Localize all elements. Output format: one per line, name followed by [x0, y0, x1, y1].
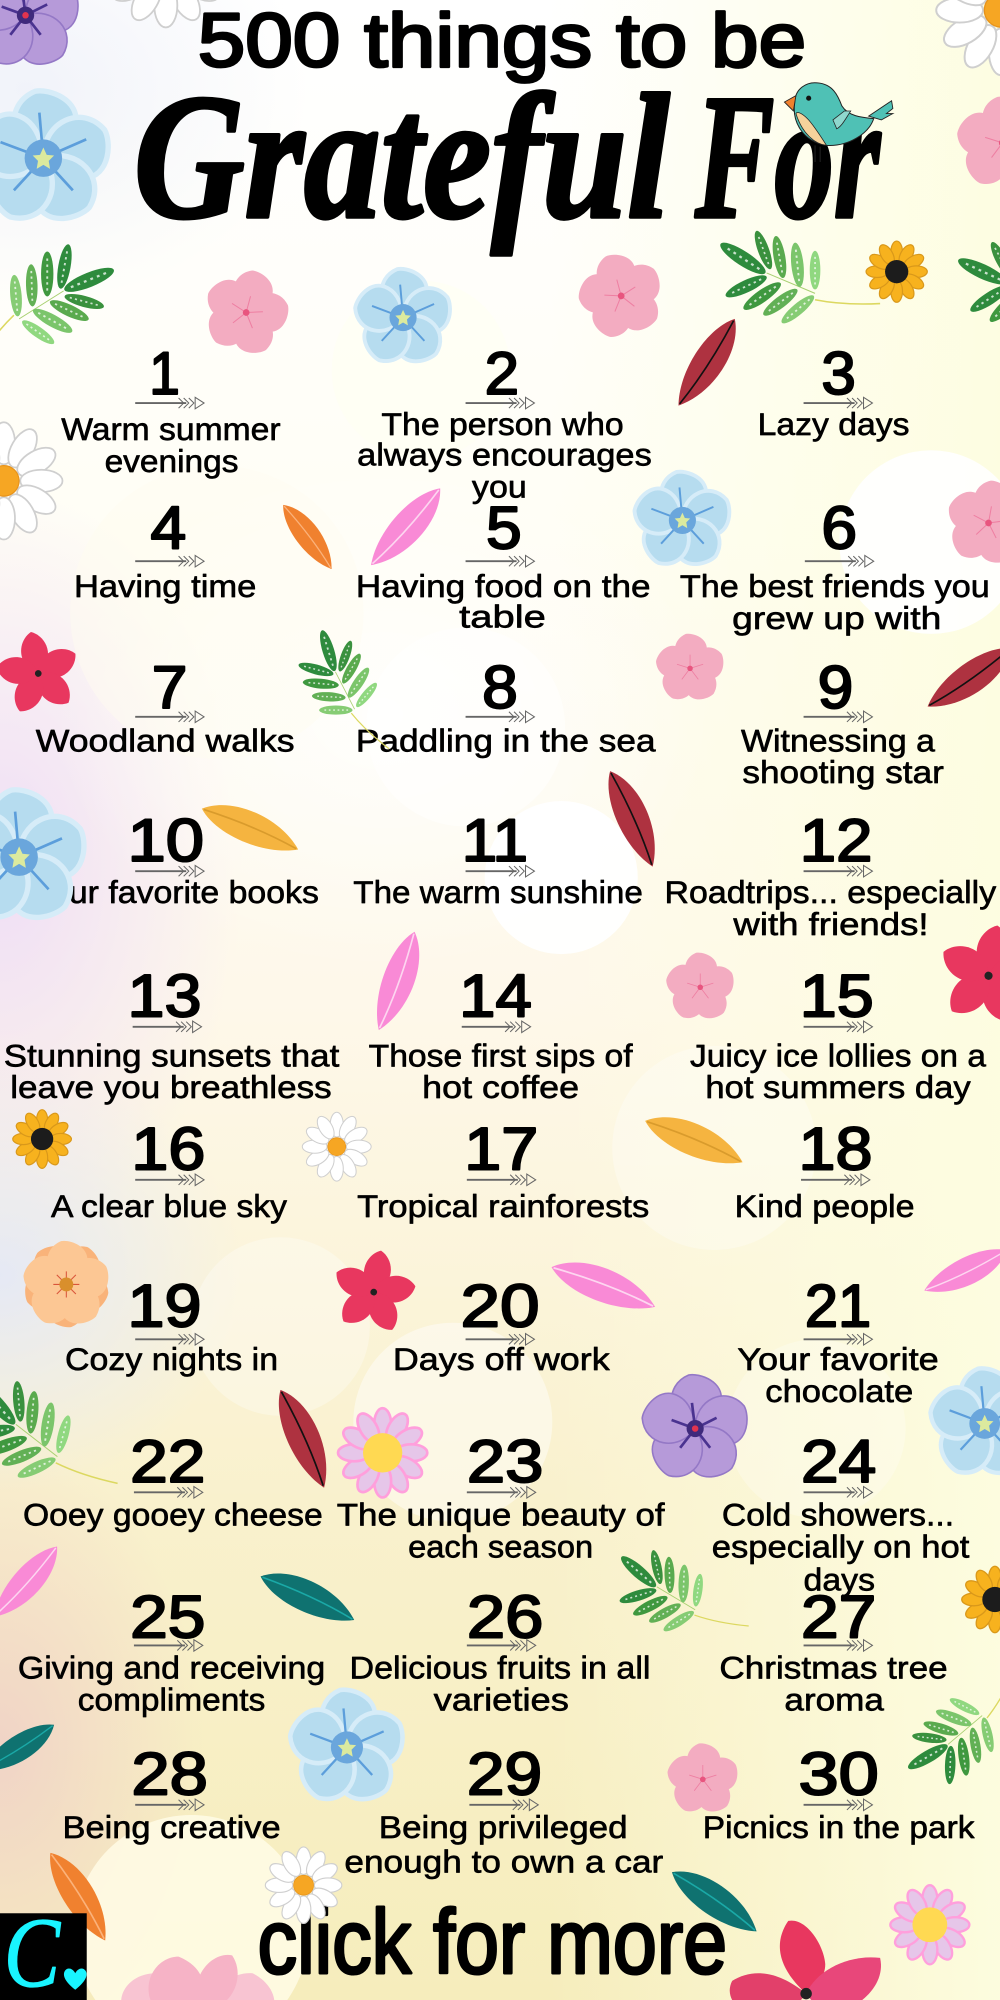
arrow: [134, 1487, 203, 1498]
number 21: 21: [805, 1273, 871, 1340]
icon: pink flower: [664, 1743, 742, 1819]
text: with friends!: [732, 906, 929, 942]
text: Your favorite books: [31, 874, 319, 910]
call to action: click for more: click for more: [258, 1892, 727, 1993]
arrow: [804, 1487, 872, 1498]
icon: lavender daisy: [890, 1885, 969, 1964]
item 14: [369, 963, 633, 1105]
item 15: [690, 963, 986, 1105]
text: Cold showers...: [722, 1497, 954, 1533]
item 17: [357, 1116, 649, 1224]
icon: yellow leaf: [640, 1105, 749, 1175]
item 3: [758, 340, 909, 442]
item 22: [23, 1428, 323, 1533]
arrow: [462, 1021, 531, 1033]
number 8: 8: [482, 654, 518, 721]
arrow: [135, 397, 204, 409]
text: compliments: [78, 1681, 265, 1717]
item 18: [735, 1116, 915, 1224]
item 6: [680, 494, 990, 636]
number 1: 1: [149, 340, 180, 407]
text: Witnessing a: [741, 722, 935, 758]
arrow: [804, 1334, 872, 1345]
text: Being creative: [62, 1809, 281, 1845]
text: you: [472, 468, 527, 504]
icon: purple flower: [0, 0, 86, 75]
icon: yellow leaf: [196, 793, 305, 863]
arrow: [466, 397, 534, 409]
arrow: [133, 1021, 202, 1033]
item 1: [61, 340, 281, 479]
text: varieties: [434, 1681, 569, 1717]
icon: blue flower: [925, 1368, 1000, 1484]
item 23: [337, 1428, 665, 1564]
icon: sunflower: [13, 1110, 71, 1168]
icon: watercolor pink flower, cropped by bottom edge: [121, 1955, 274, 2000]
arrow: [466, 711, 534, 723]
text: each season: [408, 1528, 593, 1564]
item 20: [393, 1273, 610, 1377]
text: Giving and receiving: [18, 1650, 325, 1686]
item 16: [51, 1116, 287, 1224]
icon: pink flower: [652, 634, 728, 706]
text: especially on hot: [712, 1528, 970, 1564]
icon: sunflower: [962, 1566, 1000, 1633]
icon: pink leaf: [366, 927, 431, 1036]
arrow: [804, 1021, 872, 1033]
text: The best friends you: [680, 568, 990, 604]
arrow: [801, 1174, 870, 1186]
arrow: [804, 1640, 872, 1651]
icon: blue flower: [284, 1690, 411, 1811]
icon: teal leaf: [664, 1858, 766, 1943]
arrow: [804, 865, 872, 877]
number 15: 15: [800, 963, 874, 1030]
icon: red leaf: [667, 311, 749, 415]
arrow: [135, 555, 204, 567]
item 13: [4, 963, 339, 1105]
number 13: 13: [128, 963, 202, 1030]
icon: blue flower: [0, 91, 118, 232]
icon: fern branch: [717, 229, 880, 327]
title: Grateful For: Grateful: [134, 58, 670, 256]
icon: fern branch: [277, 619, 428, 763]
title: 500 things to be: 500 things to be: [198, 0, 806, 83]
icon: red leaf: [920, 637, 1000, 720]
number 4: 4: [151, 494, 186, 561]
icon: purple flower: [637, 1375, 754, 1488]
arrow: [134, 1640, 203, 1651]
text: The unique beauty of: [337, 1497, 665, 1533]
icon: fern branch: [952, 223, 1000, 343]
text: evenings: [105, 443, 239, 479]
icon: pink flower: [566, 243, 678, 353]
number 29: 29: [467, 1741, 542, 1808]
item 9: [741, 654, 944, 790]
item 28: [62, 1741, 281, 1845]
item 5: [356, 494, 651, 635]
text: Christmas tree: [719, 1650, 948, 1686]
text: Picnics in the park: [703, 1809, 975, 1845]
text: Ooey gooey cheese: [23, 1497, 323, 1533]
item 2: [357, 340, 652, 504]
number 22: 22: [130, 1428, 205, 1495]
number 7: 7: [152, 654, 187, 721]
item 25: [18, 1584, 325, 1717]
icon: pink flower: [935, 473, 1000, 577]
icon: pink flower: [663, 953, 738, 1025]
icon: blue flower: [0, 790, 93, 931]
icon: orange leaf: [275, 497, 342, 576]
number 23: 23: [467, 1428, 543, 1495]
text: Having food on the: [356, 568, 651, 604]
title: Grateful For: For: [694, 58, 881, 256]
icon: pink leaf: [546, 1250, 662, 1321]
text: Roadtrips... especially: [665, 874, 996, 910]
text: Your favorite: [737, 1341, 939, 1377]
number 10: 10: [128, 807, 204, 874]
number 12: 12: [800, 807, 872, 874]
number 16: 16: [131, 1116, 205, 1183]
arrow: [467, 1487, 536, 1498]
arrow: [805, 555, 874, 567]
text: grew up with: [732, 600, 941, 636]
text: shooting star: [742, 754, 944, 790]
item 8: [356, 654, 656, 758]
icon: lavender daisy: [338, 1408, 427, 1497]
icon: pink flower: [952, 97, 1000, 193]
item 21: [737, 1273, 939, 1409]
item 12: [665, 807, 996, 942]
text: Having time: [74, 568, 256, 604]
icon: fern branch: [608, 1544, 758, 1646]
number 14: 14: [459, 963, 532, 1030]
item 29: [344, 1741, 664, 1879]
arrow: [467, 1174, 536, 1186]
item 11: [353, 807, 643, 910]
arrow: [135, 1334, 204, 1345]
item 4: [74, 494, 256, 604]
icon: red flower: [323, 1243, 425, 1341]
icon: red leaf: [597, 764, 668, 872]
number 3: 3: [821, 340, 856, 407]
item 7: [36, 654, 295, 758]
icon: orange flower: [1, 1223, 130, 1350]
item 10: [31, 807, 319, 910]
icon: red flower: [0, 624, 89, 722]
text: Those first sips of: [369, 1037, 633, 1073]
number 28: 28: [131, 1741, 208, 1808]
icon: orange leaf: [39, 1844, 120, 1948]
arrow: [466, 1334, 534, 1345]
arrow: [135, 865, 204, 877]
icon: pink leaf: [361, 479, 453, 577]
arrow: [135, 1174, 204, 1186]
text: days: [804, 1562, 875, 1598]
arrow: [466, 865, 534, 877]
number 11: 11: [462, 807, 528, 874]
number 17: 17: [464, 1116, 538, 1183]
icon: blue flower: [629, 472, 736, 574]
text: table: [459, 599, 546, 635]
item 19: [65, 1273, 278, 1377]
text: Kind people: [735, 1188, 915, 1224]
number 6: 6: [821, 494, 857, 561]
text: Juicy ice lollies on a: [690, 1037, 986, 1073]
text: The person who: [381, 406, 624, 442]
arrow: [469, 1799, 538, 1811]
text: Tropical rainforests: [357, 1188, 649, 1224]
icon: red leaf: [267, 1383, 340, 1494]
text: leave you breathless: [10, 1069, 332, 1105]
text: hot summers day: [705, 1069, 971, 1105]
text: Days off work: [393, 1341, 610, 1377]
arrow: [135, 711, 204, 723]
icon: teal leaf: [255, 1561, 361, 1633]
arrow: [467, 1640, 536, 1651]
icon: sunflower: [866, 241, 927, 302]
arrow: [804, 1799, 872, 1811]
icon: daisy: [265, 1847, 342, 1923]
text: always encourages: [357, 437, 652, 473]
text: Being privileged: [379, 1809, 628, 1845]
icon: daisy: [936, 0, 1000, 75]
number 20: 20: [460, 1273, 540, 1340]
number 18: 18: [798, 1116, 872, 1183]
text: enough to own a car: [344, 1843, 664, 1879]
icon: daisy: [302, 1112, 371, 1181]
arrow: [135, 1799, 204, 1811]
text: Lazy days: [758, 406, 909, 442]
text: Cozy nights in: [65, 1341, 278, 1377]
text: Woodland walks: [36, 722, 295, 758]
icon: teal leaf: [0, 1715, 62, 1782]
text: Warm summer: [61, 411, 281, 447]
item 26: [349, 1584, 651, 1717]
number 27: 27: [801, 1584, 876, 1651]
number 24: 24: [801, 1428, 876, 1495]
icon: red flower, cropped by bottom edge: [730, 1921, 881, 2000]
number 9: 9: [818, 654, 853, 721]
item 27: [719, 1584, 948, 1717]
icon: daisy: [0, 422, 62, 540]
icon: red flower: [927, 916, 1000, 1035]
icon: pink leaf: [919, 1239, 1000, 1304]
icon: bird: [784, 83, 893, 162]
arrow: [804, 397, 872, 409]
number 19: 19: [128, 1273, 202, 1340]
item 30: [703, 1741, 975, 1845]
arrow: [466, 555, 534, 567]
text: aroma: [784, 1681, 884, 1717]
icon: pink leaf: [0, 1538, 69, 1627]
number 25: 25: [130, 1584, 205, 1651]
item 24: [712, 1428, 970, 1598]
number 30: 30: [798, 1741, 879, 1808]
icon: fern branch: [0, 219, 128, 409]
text: Delicious fruits in all: [349, 1650, 651, 1686]
number 2: 2: [485, 340, 519, 407]
number 26: 26: [467, 1584, 543, 1651]
arrow: [804, 711, 872, 723]
icon: pink flower: [190, 260, 302, 369]
icon: blue flower: [350, 269, 457, 371]
text: hot coffee: [422, 1069, 579, 1105]
icon: fern branch: [895, 1641, 1000, 1803]
text: Paddling in the sea: [356, 722, 656, 758]
number 5: 5: [486, 494, 522, 561]
text: The warm sunshine: [353, 874, 643, 910]
icon: fern branch: [0, 1369, 137, 1506]
icon: daisy: [105, 0, 226, 27]
text: Stunning sunsets that: [4, 1037, 339, 1073]
text: chocolate: [765, 1373, 913, 1409]
text: A clear blue sky: [51, 1188, 287, 1224]
